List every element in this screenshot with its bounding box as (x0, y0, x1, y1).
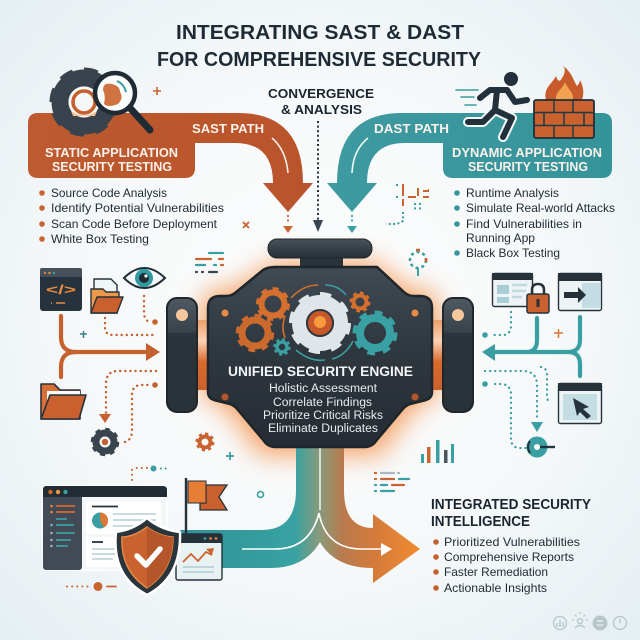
list: intelligence outcomes: Prioritized Vulnerabilities (444, 535, 580, 549)
label: DAST path: DAST PATH (374, 121, 449, 136)
icon: teal ring (258, 492, 264, 498)
gear: small teal (274, 340, 290, 354)
dotted lines: left connectors (105, 296, 156, 442)
icon: eye (124, 268, 165, 288)
icon: orange small gear (197, 434, 213, 450)
icon: small folder (91, 279, 123, 313)
list: DAST features: Black Box Testing (466, 246, 560, 260)
icon: shield with check (115, 518, 180, 595)
panel: unified security engine (167, 239, 473, 447)
dots: left connector ends (99, 319, 158, 423)
list: DAST features: Simulate Real-world Attacks (466, 201, 615, 215)
decoration: dotted trails near dashboard (67, 466, 168, 591)
engine list: Eliminate Duplicates (268, 423, 378, 435)
list: DAST features: Runtime Analysis (466, 186, 559, 200)
list: intelligence outcomes: Actionable Insights (444, 581, 547, 595)
title: FOR COMPREHENSIVE SECURITY (157, 49, 482, 71)
list: SAST features (39, 186, 224, 246)
label: static application security testing: SECURITY TESTING (52, 160, 172, 174)
list: intelligence outcomes: Comprehensive Reports (444, 550, 574, 564)
engine list: Holistic Assessment (269, 383, 378, 395)
list: SAST features: Identify Potential Vulnerabilities (51, 201, 224, 215)
icon: gear with magnifying glass (54, 72, 150, 132)
label: dynamic application security testing: SECURITY TESTING (468, 160, 588, 174)
arrow: convergence dotted down (313, 121, 323, 232)
decoration: code fragments left of engine (196, 253, 223, 272)
icon: window with arrow (558, 273, 602, 310)
engine title: UNIFIED SECURITY ENGINE (228, 364, 413, 379)
output flow arrow (180, 447, 420, 583)
label: static application security testing: STATIC APPLICATION (45, 146, 178, 160)
icon: cross (243, 222, 249, 228)
decoration: data fragments top right (386, 184, 429, 224)
gear: teal right (355, 313, 395, 353)
gear: orange lower left (238, 316, 272, 350)
list: SAST features: Source Code Analysis (51, 186, 167, 200)
heading: integrated security intelligence: INTEGRATED SECURITY (431, 496, 591, 513)
icon: teal plus (226, 452, 234, 460)
list: DAST features: Find Vulnerabilities in (466, 217, 582, 231)
icon: large folder (41, 384, 86, 419)
side tab right (443, 298, 473, 412)
icon: key (526, 436, 555, 458)
engine list (263, 383, 383, 435)
pipes (195, 320, 445, 390)
bar chart: small (421, 440, 454, 463)
heading: integrated security intelligence (431, 496, 591, 530)
icon: code window: </> (46, 282, 77, 297)
list: DAST features (454, 186, 615, 260)
icon: window with cursor (558, 383, 602, 424)
engine list: Prioritize Critical Risks (263, 410, 383, 422)
label: dynamic application security testing (452, 146, 602, 174)
panel: DAST path band and arrow (327, 113, 612, 212)
icon: firewall (534, 66, 594, 138)
icons: faint footer set (554, 612, 626, 630)
gear: orange top left (258, 289, 288, 319)
engine body (208, 267, 432, 447)
convergence and analysis label: CONVERGENCE (268, 86, 374, 101)
convergence and analysis label: & ANALYSIS (281, 102, 362, 117)
orbit arcs (283, 285, 353, 360)
decoration: dotted ring right of engine (410, 250, 426, 276)
icon: dashboard window (43, 486, 167, 570)
arrow: DAST right connector (482, 317, 580, 376)
gear: central (292, 295, 348, 351)
label: SAST path: SAST PATH (192, 121, 264, 136)
title (157, 22, 482, 71)
label: static application security testing (45, 146, 178, 174)
dots: right connector ends (482, 332, 543, 432)
decoration: code lines lower right (375, 473, 409, 491)
panel: SAST path band and arrow (28, 113, 313, 212)
list: intelligence outcomes (433, 535, 580, 595)
rivets (222, 310, 418, 400)
engine glow (200, 262, 440, 455)
icon: plus (554, 329, 563, 338)
engine list: Correlate Findings (273, 397, 372, 409)
icon: plus (80, 331, 87, 338)
label: dynamic application security testing: DYNAMIC APPLICATION (452, 146, 602, 160)
convergence and analysis label (268, 86, 374, 117)
icon: small SAST arrow (283, 215, 293, 233)
list: SAST features: Scan Code Before Deployment (51, 217, 218, 231)
icon: small DAST arrow (347, 215, 357, 233)
icon: runner (456, 72, 527, 137)
heading: integrated security intelligence: INTELLIGENCE (431, 513, 530, 530)
dotted lines: right connectors (485, 312, 551, 448)
gear: small orange (351, 293, 369, 311)
icon: chart window (176, 534, 222, 580)
arrow: SAST left connector (61, 316, 160, 377)
list: SAST features: White Box Testing (51, 232, 149, 246)
icon: plus (153, 87, 161, 95)
top handle (268, 239, 372, 270)
icon: flag (186, 478, 227, 535)
side tab left (167, 298, 197, 412)
list: intelligence outcomes: Faster Remediation (444, 565, 548, 579)
icon: window with lock (492, 273, 549, 313)
list: DAST features: Running App (466, 231, 535, 245)
title: INTEGRATING SAST & DAST (176, 22, 464, 44)
icon: small gear bottom left (92, 430, 118, 454)
icon: code window (40, 268, 82, 311)
